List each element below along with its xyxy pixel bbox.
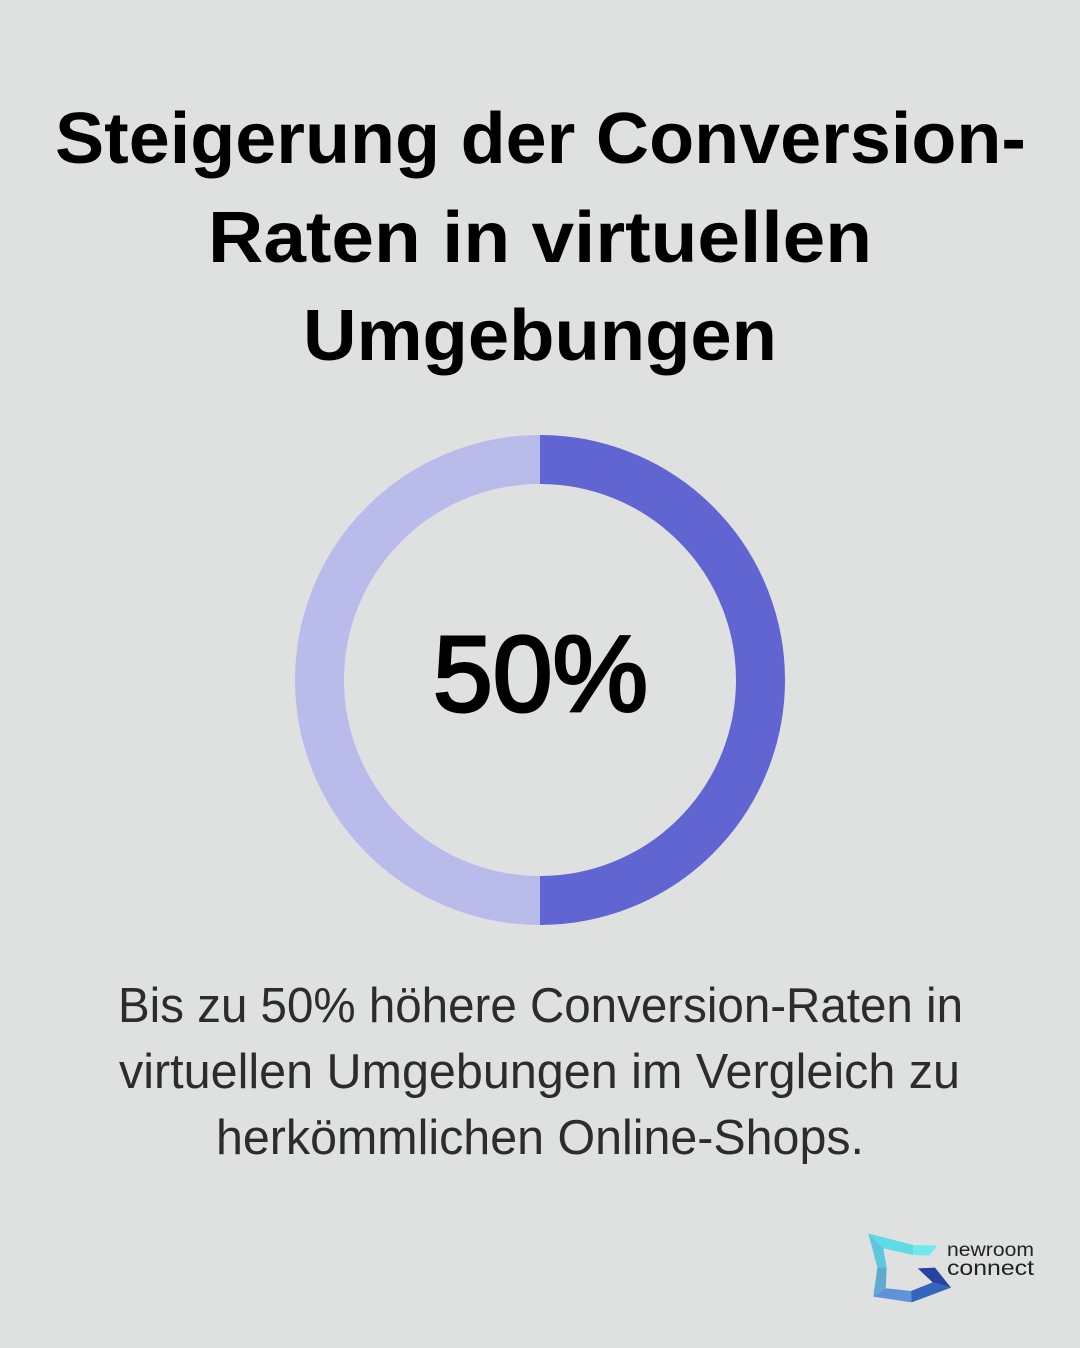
- logo: newroom connect: connect: [947, 1257, 1034, 1280]
- donut value: 50%: [433, 613, 648, 734]
- description text: herkömmlichen Online-Shops.: [216, 1111, 864, 1165]
- title: Steigerung der Conversion-: [55, 99, 1026, 179]
- description text: Bis zu 50% höhere Conversion-Raten in: [118, 979, 963, 1033]
- title: Raten in virtuellen: [208, 198, 872, 278]
- description text: virtuellen Umgebungen im Vergleich zu: [119, 1045, 960, 1099]
- description text: [118, 979, 963, 1165]
- logo mark: [868, 1233, 951, 1302]
- logo wordmark: newroom: [947, 1240, 1034, 1261]
- title: Umgebungen: [303, 296, 777, 376]
- donut chart: 50%: [320, 460, 760, 900]
- logo: newroom connect: [868, 1233, 1034, 1302]
- title: [55, 99, 1026, 376]
